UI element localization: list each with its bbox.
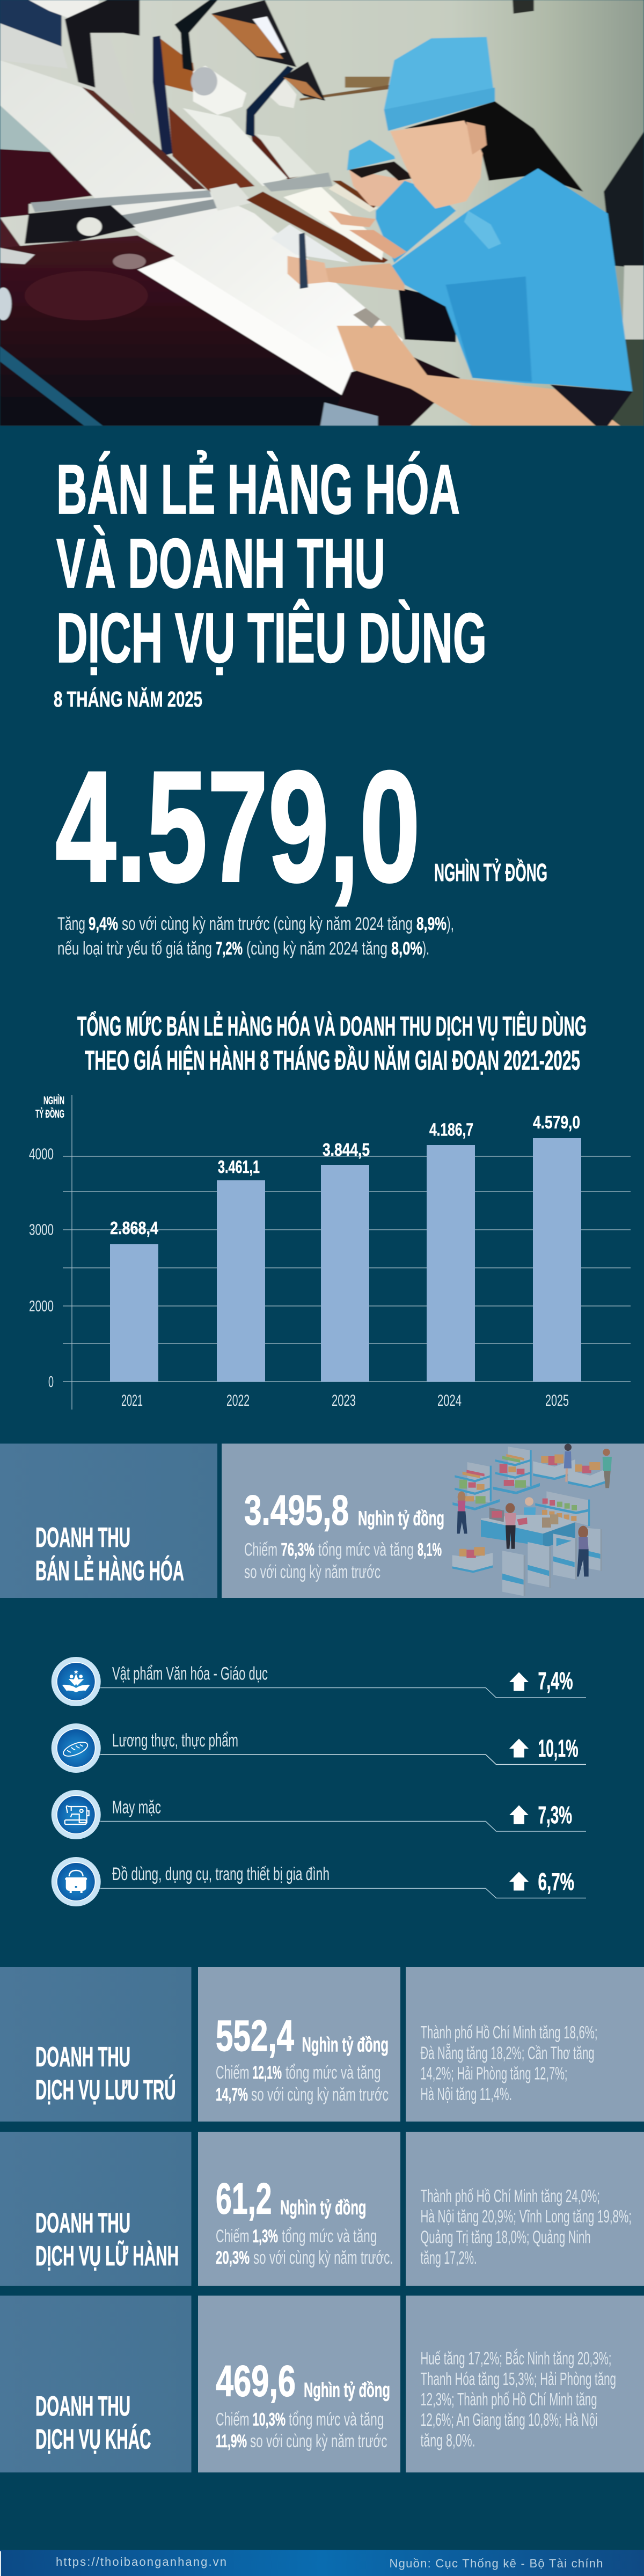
bar chart (29, 1095, 631, 1410)
back machines (158, 37, 197, 93)
headline description: (cùng kỳ năm 2024 tăng (246, 938, 387, 959)
item: cultural and educational goods (52, 1657, 586, 1706)
panel: travel figures: Nghìn tỷ đồng (280, 2197, 366, 2219)
panel: other services figures: 11,9% (216, 2431, 247, 2452)
headline description (57, 914, 454, 959)
headline description: 7,2% (216, 938, 243, 959)
panel: retail revenue figures: Nghìn tỷ đồng (358, 1508, 444, 1530)
woman purple (578, 1526, 588, 1539)
bar values: 3.461,1 (218, 1157, 260, 1177)
arrow up (509, 1738, 529, 1758)
year labels: 2025 (545, 1392, 569, 1410)
item: cultural and educational goods: 7,4% (538, 1667, 573, 1694)
retail description: Chiếm (244, 1540, 277, 1560)
person dress (565, 1444, 572, 1451)
retail description (244, 1540, 442, 1582)
shelf left (467, 1462, 490, 1502)
front board (0, 60, 402, 401)
panel: other services figures: Nghìn tỷ đồng (304, 2379, 390, 2402)
panel: retail revenue figures (222, 1443, 644, 1598)
headline figure: 4.579,0 (55, 739, 420, 915)
panel: travel provinces (406, 2132, 644, 2286)
bar values (110, 1112, 580, 1238)
dark under table (398, 288, 456, 342)
year labels (121, 1392, 569, 1410)
panel: accommodation figures (198, 1967, 400, 2122)
panel: accommodation figures: 12,1% (252, 2063, 282, 2083)
leader line (100, 1821, 586, 1831)
panel: accommodation figures: 552,4 (216, 2012, 294, 2060)
bars (110, 1138, 581, 1382)
arrow up (509, 1805, 529, 1824)
headline description: 8,0% (391, 938, 422, 959)
panel: accommodation figures: 14,7% (216, 2085, 248, 2105)
display box (533, 1459, 575, 1479)
item: food (52, 1723, 586, 1773)
panel: travel label: DOANH THU (35, 2207, 130, 2239)
panel: other services provinces: tăng 8,0%. (421, 2431, 475, 2450)
item: apparel (52, 1790, 586, 1839)
person teal (603, 1449, 610, 1456)
y axis labels: 3000 (29, 1221, 54, 1238)
illustration: shop (452, 1444, 612, 1596)
panel: other services figures: so với cùng kỳ năm trước (250, 2431, 387, 2452)
icon: book and people (52, 1657, 101, 1706)
panel: travel provinces: tăng 17,2%. (421, 2248, 477, 2267)
item: food: Lương thực, thực phẩm (112, 1730, 238, 1751)
cashier (525, 1497, 533, 1506)
headline description: ). (422, 938, 429, 959)
panel: other services figures: Chiếm (216, 2409, 249, 2430)
front worker (405, 101, 583, 192)
display box 3 (452, 1553, 493, 1570)
panel: accommodation figures: tổng mức và tăng (286, 2063, 381, 2083)
panel: other services figures: tổng mức và tăng (289, 2409, 384, 2430)
item: household goods: Đồ dùng, dụng cụ, trang thiết bị gia đình (112, 1864, 330, 1884)
panel: other services figures: 10,3% (252, 2409, 286, 2430)
panel: other services provinces (406, 2295, 644, 2472)
person pink (458, 1491, 465, 1503)
panel: accommodation label (0, 1967, 191, 2122)
item: apparel: 7,3% (538, 1801, 572, 1829)
panel: travel figures: 1,3% (252, 2226, 278, 2247)
panel: accommodation provinces: Hà Nội tăng 11,4%. (421, 2084, 512, 2104)
retail description: so với cùng kỳ năm trước (244, 1562, 380, 1582)
panel: travel label: DỊCH VỤ LỮ HÀNH (35, 2240, 179, 2272)
desk (0, 236, 351, 425)
panel: other services label: DOANH THU (35, 2391, 130, 2422)
leader line (100, 1889, 586, 1898)
item: apparel: May mặc (112, 1797, 161, 1818)
retail description: tổng mức và tăng (318, 1540, 414, 1560)
year labels: 2021 (121, 1392, 143, 1410)
panel: travel figures: 20,3% (216, 2248, 250, 2268)
item: household goods (52, 1857, 586, 1906)
item: household goods: 6,7% (538, 1868, 574, 1895)
panel: retail revenue label: DOANH THU (35, 1522, 130, 1553)
arrow up (509, 1672, 529, 1691)
icon: rice cooker (52, 1857, 101, 1906)
back shelf (546, 1491, 589, 1525)
panel: accommodation figures: so với cùng kỳ năm trước (251, 2085, 389, 2105)
panel: travel figures: so với cùng kỳ năm trước. (253, 2248, 393, 2268)
leader line (100, 1755, 586, 1764)
main title: VÀ DOANH THU (56, 524, 385, 603)
panel: travel figures: Chiếm (216, 2226, 249, 2247)
axis unit (35, 1095, 64, 1120)
y axis labels: 0 (48, 1374, 54, 1391)
panel: travel figures (198, 2132, 400, 2286)
bar values: 2.868,4 (110, 1218, 159, 1238)
headline description: so với cùng kỳ năm trước (cùng kỳ năm 2024 tăng (122, 914, 413, 934)
middle bench (246, 192, 388, 263)
axis unit: NGHÌN (43, 1095, 64, 1107)
main title (56, 450, 487, 677)
retail description: 76,3% (281, 1540, 314, 1560)
retail value: 3.495,8 (244, 1486, 349, 1533)
back worker (349, 170, 415, 208)
bar values: 3.844,5 (323, 1140, 370, 1159)
retail description: 8,1% (418, 1540, 442, 1560)
photo: workers at inspection tables (0, 0, 644, 425)
panel: travel label (0, 2132, 191, 2286)
y axis labels: 4000 (29, 1146, 54, 1163)
chart title (77, 1010, 587, 1075)
panel: other services figures: 469,6 (216, 2357, 296, 2406)
bar values: 4.186,7 (429, 1119, 473, 1140)
panel: travel figures: 61,2 (216, 2174, 272, 2223)
subtitle: 8 THÁNG NĂM 2025 (54, 687, 202, 711)
panel: retail revenue label: BÁN LẺ HÀNG HÓA (35, 1555, 184, 1587)
y axis labels: 2000 (29, 1298, 54, 1315)
counter (481, 1515, 575, 1533)
panel: accommodation provinces (406, 1967, 644, 2122)
customer (506, 1503, 515, 1513)
year labels: 2022 (226, 1392, 250, 1410)
item: cultural and educational goods: Vật phẩm Văn hóa - Giáo dục (112, 1663, 268, 1684)
bar values: 4.579,0 (533, 1112, 580, 1132)
icon: sewing machine (52, 1790, 101, 1839)
panel: travel figures: tổng mức và tăng (282, 2226, 377, 2247)
headline figure: NGHÌN TỶ ĐỒNG (434, 858, 547, 886)
arrow up (509, 1872, 529, 1891)
panel: retail revenue label (0, 1443, 217, 1598)
display box 2 (568, 1469, 608, 1486)
axis unit: TỶ ĐỒNG (35, 1107, 64, 1120)
lamps (211, 0, 297, 67)
panel: accommodation figures: Nghìn tỷ đồng (302, 2034, 389, 2056)
year labels: 2023 (332, 1392, 356, 1410)
year labels: 2024 (437, 1392, 462, 1410)
headline description: 9,4% (89, 914, 118, 934)
headline description: ), (447, 914, 454, 934)
panel: other services figures (198, 2295, 400, 2472)
panel: other services label: DỊCH VỤ KHÁC (35, 2424, 151, 2455)
panel: accommodation label: DỊCH VỤ LƯU TRÚ (35, 2074, 176, 2105)
footer: Nguồn: Cục Thống kê - Bộ Tài chính (390, 2557, 603, 2570)
shelf middle (508, 1447, 531, 1486)
footer: https://thoibaonganhang.vn (56, 2555, 226, 2568)
headline description: nếu loại trừ yếu tố giá tăng (57, 938, 212, 959)
chrome bars (31, 190, 211, 212)
headline description: Tăng (57, 914, 85, 934)
gates (502, 1551, 525, 1596)
leader line (100, 1688, 586, 1698)
footer (0, 2550, 644, 2576)
panel: other services label (0, 2295, 191, 2472)
panel: accommodation figures: Chiếm (216, 2063, 249, 2083)
item: food: 10,1% (538, 1735, 579, 1762)
icon: bread (52, 1723, 101, 1773)
headline description: 8,9% (416, 914, 447, 934)
y axis labels (29, 1146, 54, 1391)
panel: accommodation label: DOANH THU (35, 2042, 130, 2073)
